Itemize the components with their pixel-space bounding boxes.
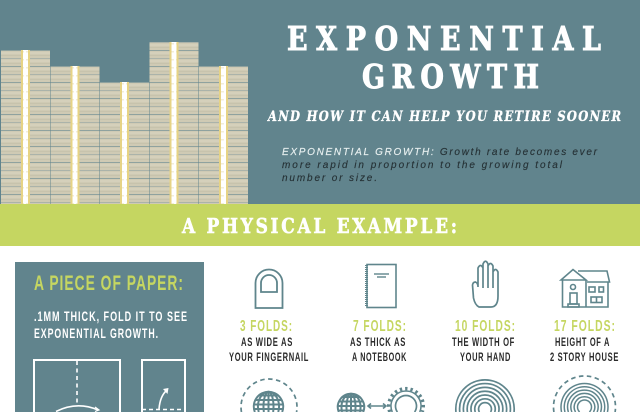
title: GROWTH	[362, 58, 539, 97]
icon: notebook	[366, 264, 396, 308]
caption	[550, 337, 619, 364]
panel: a piece of paper	[15, 262, 204, 412]
label: 7 FOLDS:	[353, 318, 407, 335]
caption: THE WIDTH OF	[452, 337, 515, 349]
definition text: EXPONENTIAL GROWTH: Growth rate becomes ever	[282, 147, 598, 158]
definition text	[282, 147, 598, 184]
icon: globe and gear with arrow	[338, 389, 423, 412]
header background	[0, 0, 640, 204]
panel description: .1MM THICK, FOLD IT TO SEE	[34, 308, 188, 324]
label: 3 FOLDS:	[240, 318, 293, 335]
diagram: half sheet fold	[142, 360, 185, 412]
panel heading: A PIECE OF PAPER:	[34, 272, 184, 295]
caption: AS WIDE AS	[241, 337, 293, 349]
definition text: number or size.	[282, 173, 377, 184]
item: 10 folds	[452, 261, 516, 364]
panel description: EXPONENTIAL GROWTH.	[34, 325, 159, 341]
caption: A NOTEBOOK	[352, 352, 407, 364]
caption	[350, 337, 407, 364]
panel description	[34, 308, 188, 341]
item: 3 folds	[229, 270, 309, 364]
icon: fingernail	[256, 270, 282, 308]
definition text: more rapid in proportion to the growing total	[282, 160, 563, 171]
icon: hand	[472, 261, 498, 307]
diagram: full sheet fold	[34, 360, 120, 412]
title: EXPONENTIAL	[287, 20, 601, 59]
caption	[229, 337, 309, 364]
green banner	[0, 204, 640, 246]
label: 10 FOLDS:	[455, 318, 516, 335]
icon: concentric rings	[456, 380, 514, 412]
banner heading: A PHYSICAL EXAMPLE:	[181, 214, 457, 238]
icon: house	[561, 270, 610, 307]
item: 7 folds	[350, 264, 407, 364]
title	[287, 20, 601, 97]
caption: YOUR HAND	[460, 352, 511, 364]
subtitle: AND HOW IT CAN HELP YOU RETIRE SOONER	[267, 108, 621, 124]
caption: YOUR FINGERNAIL	[229, 352, 309, 364]
illustration: stacks of money	[1, 42, 248, 204]
caption	[452, 337, 515, 364]
item: 17 folds	[550, 270, 619, 364]
caption: HEIGHT OF A	[555, 337, 610, 349]
caption: AS THICK AS	[350, 337, 406, 349]
icon: concentric rings in dashed orbit	[554, 376, 616, 412]
icon: globe in dashed orbit	[241, 379, 297, 412]
